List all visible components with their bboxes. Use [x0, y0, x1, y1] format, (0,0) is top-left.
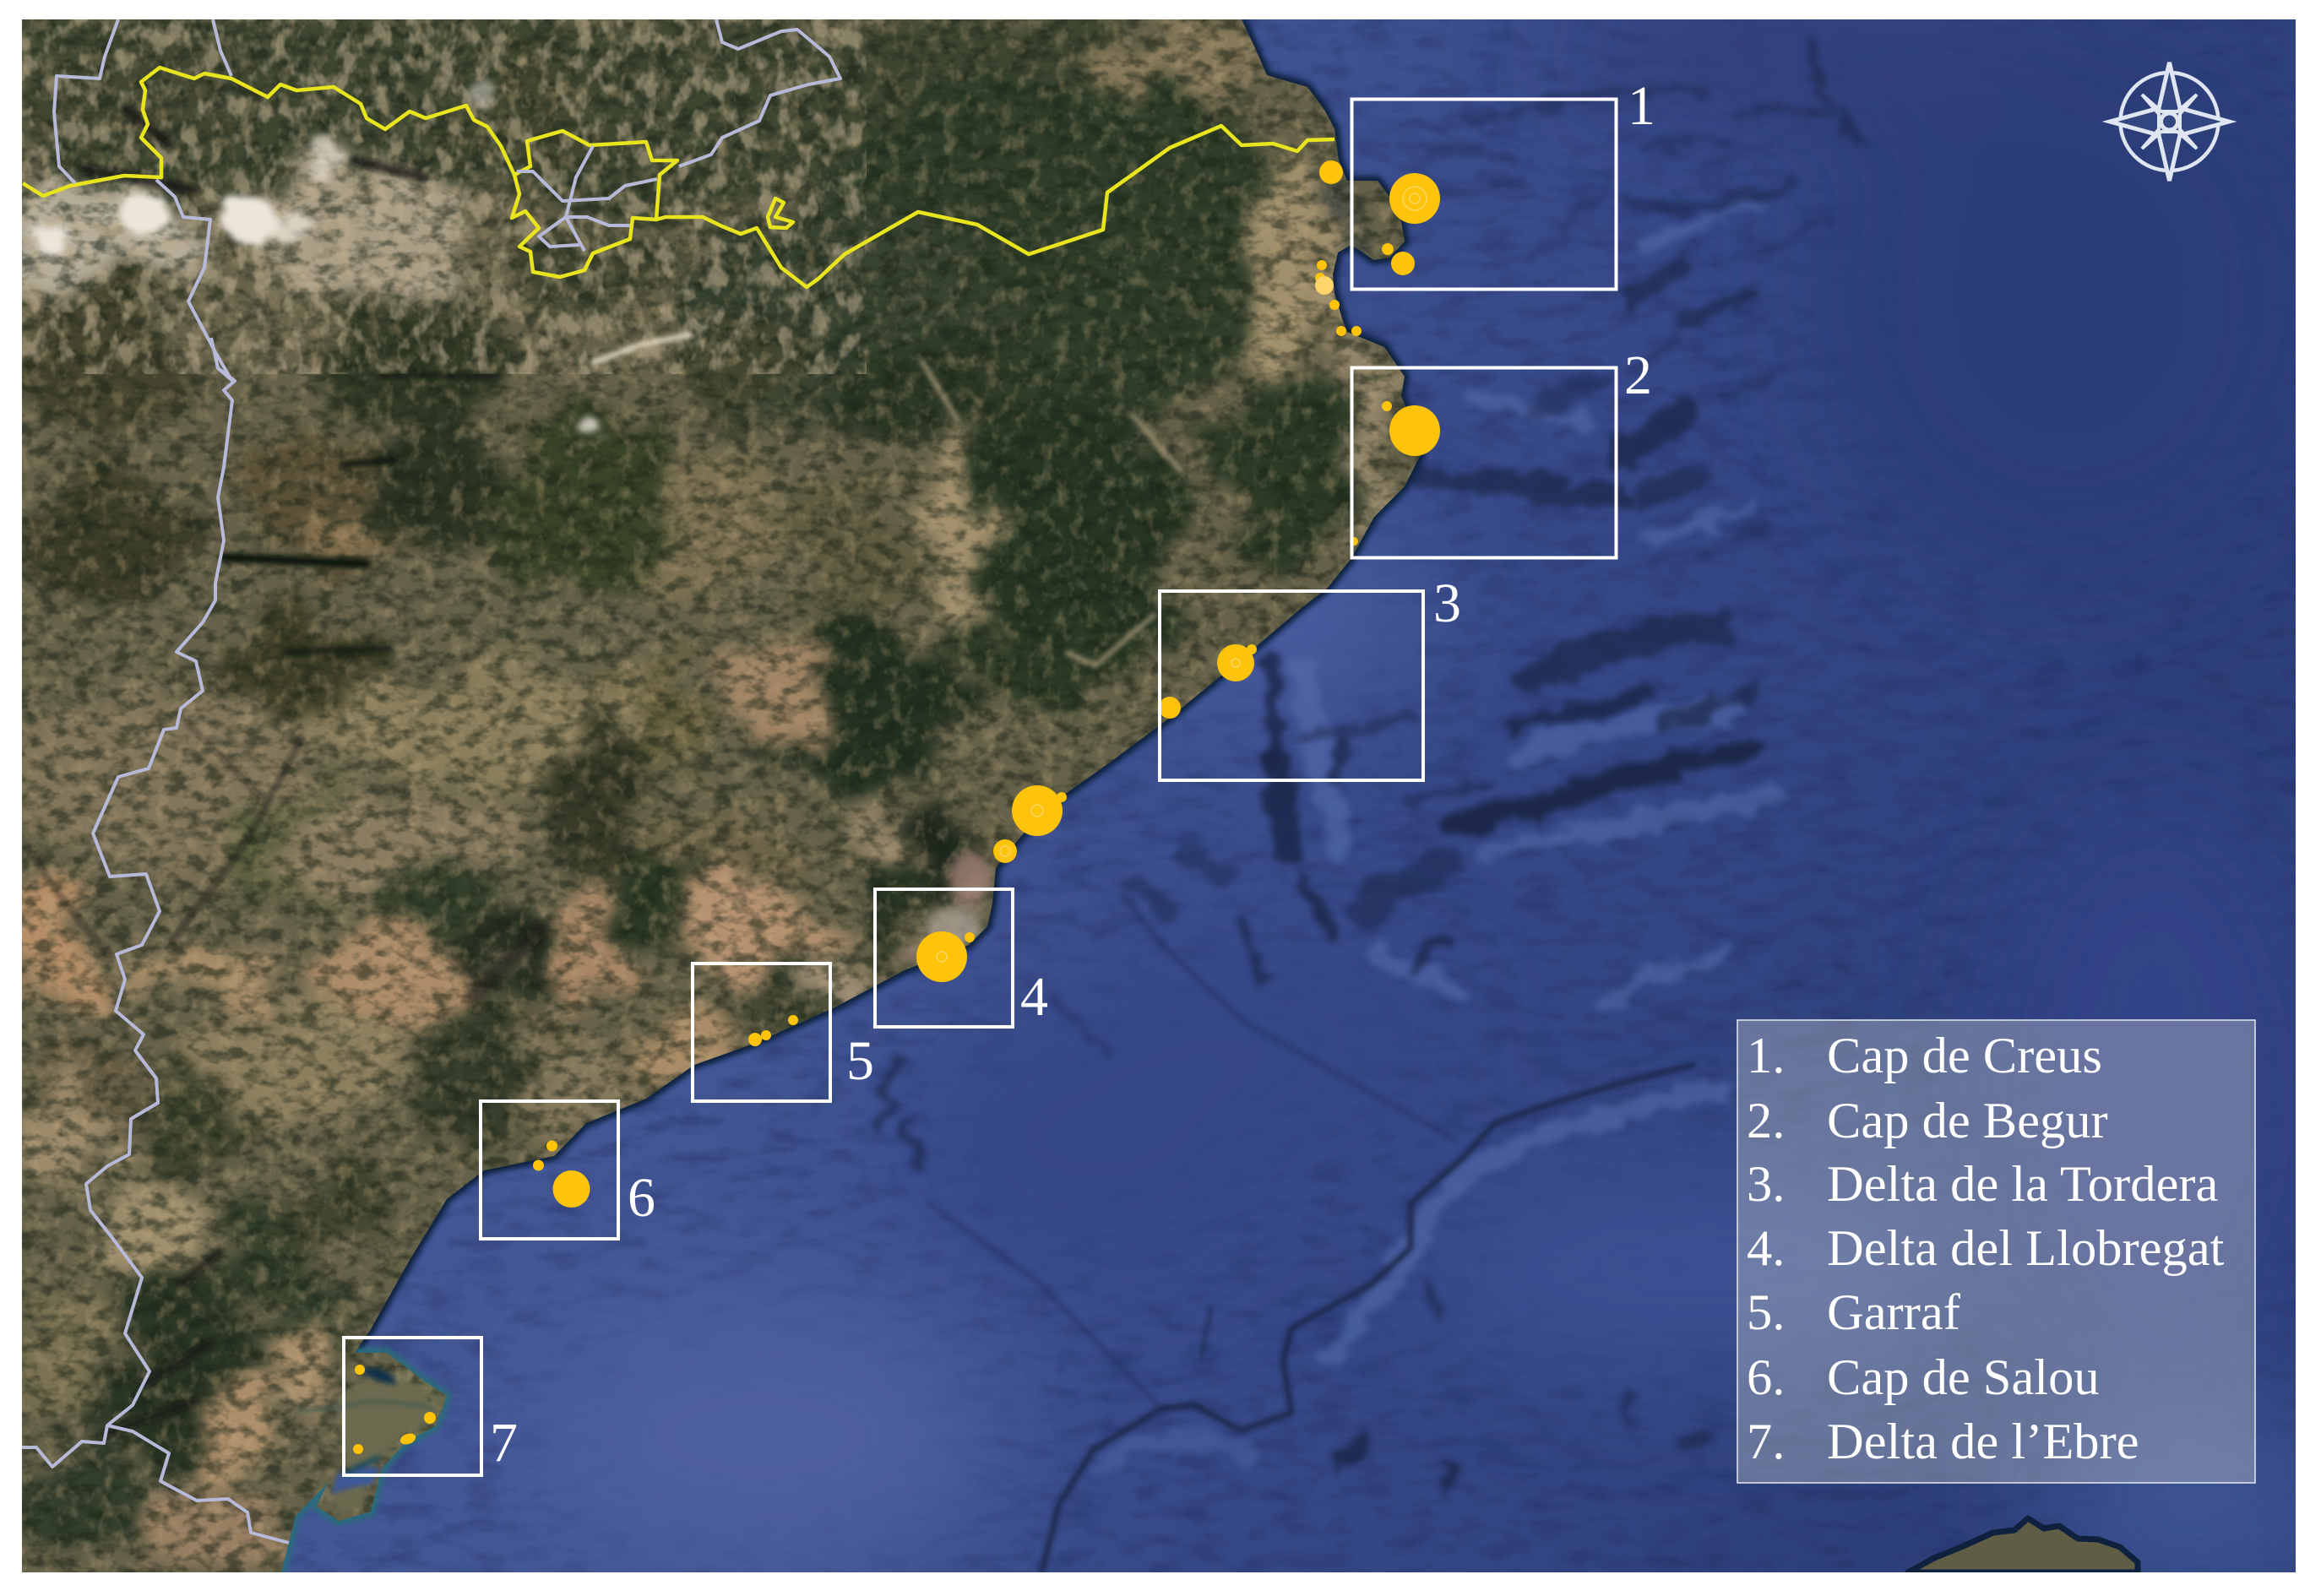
sea: dark submarine ridges [878, 38, 1873, 1167]
legend item 6: Cap de Salou [1827, 1349, 2100, 1406]
snow and bright peaks [32, 83, 603, 438]
Ebre delta water [331, 1368, 397, 1495]
legend item 2: 2. [1747, 1093, 1785, 1149]
terrain colour patches [5, 17, 1394, 1571]
region box 1 [1351, 75, 1655, 289]
island: Menorca [1908, 1518, 2138, 1572]
legend item 5: 5. [1747, 1284, 1785, 1341]
region box 3: 3 [1433, 573, 1461, 634]
legend item 1: Cap de Creus [1827, 1028, 2102, 1084]
region box 1: 1 [1628, 75, 1655, 137]
legend item 5 [1747, 1284, 1961, 1341]
terrain texture [22, 19, 1458, 1572]
legend item 1: 1. [1747, 1028, 1785, 1084]
Barcelona urban area [895, 851, 990, 964]
legend item 3: 3. [1747, 1156, 1785, 1213]
region box 6 [481, 1101, 655, 1239]
legend item 4: Delta del Llobregat [1827, 1220, 2225, 1277]
land [5, 17, 1458, 1572]
sea: seamount shadows [1322, 1282, 1715, 1496]
legend item 5: Garraf [1827, 1284, 1961, 1341]
sea: dark canyon [929, 895, 1693, 1570]
region box 5 [693, 964, 874, 1101]
site markers (yellow circles) [353, 160, 1440, 1454]
region box 6: 6 [628, 1167, 655, 1229]
legend item 7: 7. [1747, 1414, 1785, 1470]
region box 4: 4 [1020, 966, 1048, 1028]
sea: light slopes [1106, 203, 1774, 1461]
legend item 2: Cap de Begur [1827, 1093, 2108, 1149]
legend item 3: Delta de la Tordera [1827, 1156, 2218, 1213]
coastline halo [281, 19, 1421, 1572]
legend item 6: 6. [1747, 1349, 1785, 1406]
region box 2 [1351, 345, 1652, 557]
legend item 4: 4. [1747, 1220, 1785, 1277]
marker highlights [937, 187, 1427, 962]
French and Andorran border (yellow) [23, 68, 1334, 287]
regional borders (lilac) [22, 19, 840, 1543]
legend item 7: Delta de l’Ebre [1827, 1414, 2139, 1470]
legend panel [1737, 1020, 2255, 1483]
region box 5: 5 [846, 1030, 874, 1092]
dark crest shadows and rivers [25, 110, 541, 1436]
region box 3 [1160, 573, 1461, 780]
region box 7: 7 [490, 1412, 518, 1474]
region box 7 [344, 1338, 518, 1475]
region box 2: 2 [1624, 345, 1652, 406]
region box 4 [875, 889, 1048, 1028]
light valleys [921, 359, 1182, 665]
icon: compass rose [2110, 62, 2229, 181]
Ebre delta [297, 1381, 436, 1516]
